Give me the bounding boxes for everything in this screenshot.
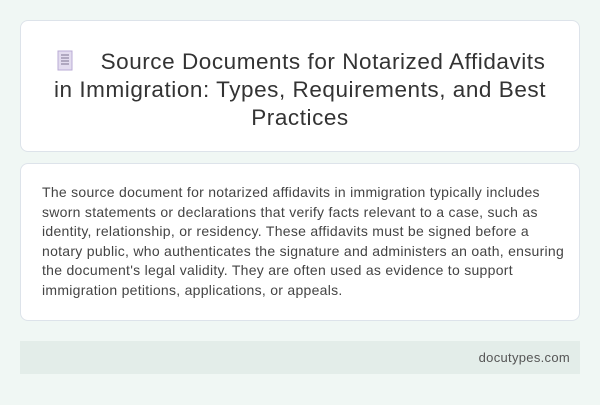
description card [20, 163, 580, 321]
description text: identity, relationship, or residency. These affidavits must be signed before a [42, 223, 529, 239]
description text: sworn statements or declarations that verify facts relevant to a case, such as [42, 204, 538, 220]
footer [20, 341, 580, 374]
title: Practices [251, 105, 349, 130]
description text: the document's legal validity. They are often used as evidence to support [42, 262, 513, 278]
description text: notary public, who authenticates the signature and administers an oath, ensuring [42, 243, 564, 259]
description text: The source document for notarized affidavits in immigration typically includes [42, 184, 540, 200]
title: in Immigration: Types, Requirements, and Best [54, 77, 546, 102]
title [54, 49, 546, 130]
description text [42, 184, 564, 298]
description text: immigration petitions, applications, or appeals. [42, 282, 343, 298]
footer: docutypes.com [479, 350, 570, 365]
title: Source Documents for Notarized Affidavits [101, 49, 545, 74]
title card [20, 20, 580, 152]
